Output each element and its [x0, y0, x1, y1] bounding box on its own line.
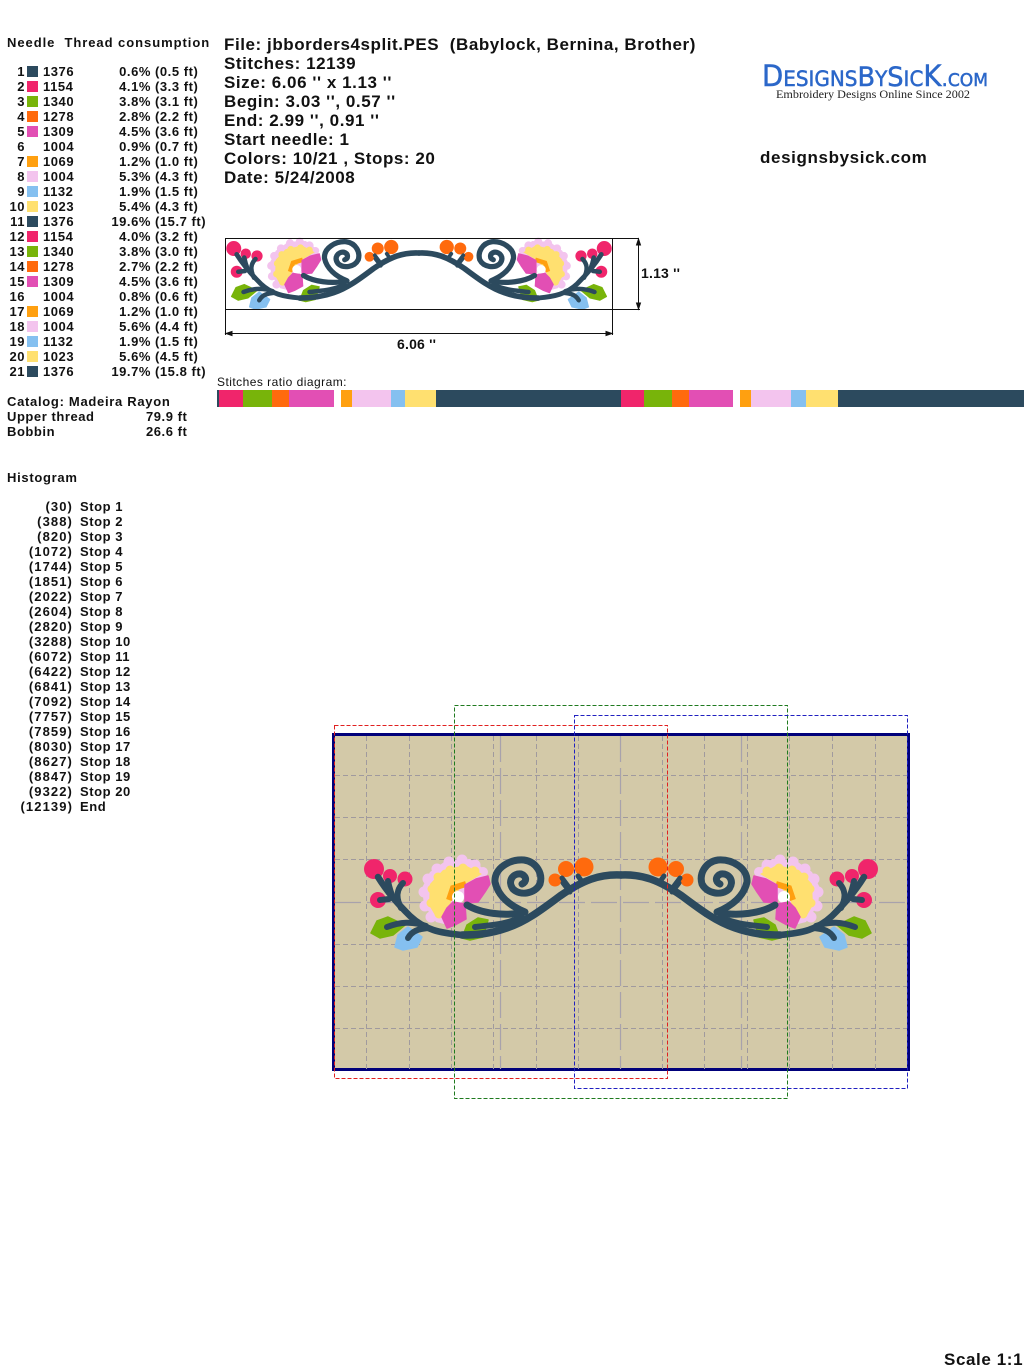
stop 17: Stop 17 — [80, 739, 131, 754]
needle 8 — [17, 169, 198, 184]
stop 7: Stop 7 — [80, 589, 123, 604]
needle 19: 19 — [9, 334, 25, 349]
needle 9: 1.9% — [119, 184, 151, 199]
needle 4 — [17, 109, 198, 124]
stop 14: Stop 14 — [80, 694, 131, 709]
stop 7 — [29, 589, 123, 604]
needle 8: (4.3 ft) — [155, 169, 198, 184]
hoop canvas with split design — [320, 695, 920, 1110]
needle 19: (1.5 ft) — [155, 334, 198, 349]
hoop background — [334, 734, 908, 1070]
stop 20: (9322) — [29, 784, 73, 799]
end total — [0, 799, 130, 814]
needle 13: 13 — [9, 244, 25, 259]
stop 19: Stop 19 — [80, 769, 131, 784]
stop 20 — [0, 784, 130, 799]
stop 9 — [29, 619, 123, 634]
stop 16: (7859) — [29, 724, 73, 739]
needle 9: 9 — [17, 184, 25, 199]
needle 12 — [9, 229, 198, 244]
needle 12: 1154 — [43, 229, 73, 244]
stop 9: Stop 9 — [80, 619, 123, 634]
needle 16: 16 — [9, 289, 25, 304]
needle 12: 12 — [9, 229, 25, 244]
split hoop outline: red — [334, 726, 668, 1078]
stop 19 — [0, 769, 130, 784]
logo: DesignsBySick.com: DESIGNSBYSICK.COM — [762, 59, 988, 93]
design info block — [224, 35, 704, 189]
needle 20: 1023 — [43, 349, 74, 364]
stop 3 — [37, 529, 123, 544]
stitches ratio bar — [217, 390, 1024, 407]
needle 7: 1069 — [43, 154, 74, 169]
needle 18: 1004 — [43, 319, 74, 334]
stop 6 — [29, 574, 123, 589]
needle 21: 19.7% — [111, 364, 151, 379]
stop 1: (30) — [45, 499, 73, 514]
needle 18 — [9, 319, 198, 334]
stop 11: Stop 11 — [80, 649, 130, 664]
needle 16: 1004 — [43, 289, 74, 304]
stop 17: (8030) — [29, 739, 73, 754]
stop 2: (388) — [37, 514, 73, 529]
stop 4: Stop 4 — [80, 544, 123, 559]
embroidery motif — [364, 854, 878, 950]
stop 3: (820) — [37, 529, 73, 544]
needle 12: 4.0% — [119, 229, 151, 244]
stop 13: (6841) — [29, 679, 73, 694]
catalog and thread totals — [7, 394, 187, 439]
needle 15: 15 — [9, 274, 25, 289]
stop 18: Stop 18 — [80, 754, 131, 769]
stop 15 — [29, 709, 131, 724]
needle 6: 1004 — [43, 139, 74, 154]
needle 2: 4.1% — [119, 79, 151, 94]
needle 5: 5 — [17, 124, 25, 139]
stop 13 — [29, 679, 131, 694]
end total: End — [80, 799, 106, 814]
needle 1: 1376 — [43, 64, 74, 79]
needle 9: (1.5 ft) — [155, 184, 198, 199]
split hoop outline: green — [454, 706, 788, 1098]
needle 13: 1340 — [43, 244, 74, 259]
needle 11: 1376 — [43, 214, 74, 229]
stop 18: (8627) — [29, 754, 73, 769]
upper thread total: Upper thread — [7, 409, 95, 424]
needle 21 — [9, 364, 206, 379]
needle 3: 1340 — [43, 94, 74, 109]
needle 20 — [9, 349, 198, 364]
stitches ratio label: Stitches ratio diagram: — [217, 375, 347, 389]
needle 2: (3.3 ft) — [155, 79, 198, 94]
needle 15: (3.6 ft) — [155, 274, 198, 289]
scale label: Scale 1:1 — [944, 1350, 1023, 1369]
stop 13: Stop 13 — [80, 679, 131, 694]
needle 5: (3.6 ft) — [155, 124, 198, 139]
stop 14 — [29, 694, 131, 709]
needle 18: 18 — [9, 319, 25, 334]
needle 11: (15.7 ft) — [155, 214, 206, 229]
needle 7 — [17, 154, 198, 169]
stop 3: Stop 3 — [80, 529, 123, 544]
needle 20: 5.6% — [119, 349, 151, 364]
needle 6: 6 — [17, 139, 25, 154]
stop 9: (2820) — [29, 619, 73, 634]
needle 11: 11 — [10, 214, 25, 229]
needle 3 — [17, 94, 198, 109]
needle 7: (1.0 ft) — [155, 154, 198, 169]
needle 15: 1309 — [43, 274, 74, 289]
needle 19: 1132 — [43, 334, 73, 349]
stop 2 — [37, 514, 123, 529]
stitches: Stitches: 12139 — [224, 54, 356, 73]
needle 1: (0.5 ft) — [155, 64, 198, 79]
needle 14: 1278 — [43, 259, 74, 274]
histogram heading: Histogram — [7, 470, 78, 485]
needle 14: (2.2 ft) — [155, 259, 198, 274]
stop 12 — [29, 664, 131, 679]
upper thread value: 79.9 ft — [146, 409, 187, 424]
needle 18: (4.4 ft) — [155, 319, 198, 334]
needle 3: 3.8% — [119, 94, 151, 109]
needle 13 — [9, 244, 198, 259]
needle 20: 20 — [9, 349, 25, 364]
colors and stops: Colors: 10/21 , Stops: 20 — [224, 149, 435, 168]
needle 10: 5.4% — [119, 199, 151, 214]
needle 16 — [9, 289, 198, 304]
needle 6: (0.7 ft) — [155, 139, 198, 154]
stop 12: (6422) — [29, 664, 73, 679]
needle 2 — [17, 79, 198, 94]
stop 4: (1072) — [29, 544, 73, 559]
needle 21: (15.8 ft) — [155, 364, 206, 379]
date: Date: 5/24/2008 — [224, 168, 355, 187]
needle 11: 19.6% — [111, 214, 151, 229]
end total: (12139) — [20, 799, 73, 814]
height label: 1.13 '' — [641, 265, 680, 281]
stop 5: Stop 5 — [80, 559, 123, 574]
stop 10: Stop 10 — [80, 634, 131, 649]
stop 19: (8847) — [29, 769, 73, 784]
logo: DesignsBySick.com: Embroidery Designs Online Since 2002 — [776, 87, 970, 101]
split hoop outline: blue — [574, 716, 908, 1088]
needle 6 — [17, 139, 198, 154]
stop 8: Stop 8 — [80, 604, 123, 619]
needle 15: 4.5% — [119, 274, 151, 289]
needle 18: 5.6% — [119, 319, 151, 334]
needle 5: 1309 — [43, 124, 74, 139]
needle 15 — [9, 274, 198, 289]
needle 10: 10 — [9, 199, 25, 214]
file name: File: jbborders4split.PES (Babylock, Bernina, Brother) — [224, 35, 696, 54]
needle 3: 3 — [17, 94, 25, 109]
needle 17 — [9, 304, 198, 319]
needle 8: 5.3% — [119, 169, 151, 184]
needle 13: 3.8% — [119, 244, 151, 259]
embroidery motif preview — [226, 238, 612, 309]
needle 14: 2.7% — [119, 259, 151, 274]
needle 19: 1.9% — [119, 334, 151, 349]
stop 5 — [29, 559, 123, 574]
needle 11 — [10, 214, 206, 229]
needle 10: (4.3 ft) — [155, 199, 198, 214]
stop 2: Stop 2 — [80, 514, 123, 529]
needle 7: 7 — [17, 154, 25, 169]
stop 1 — [45, 499, 123, 514]
needle 1: 1 — [17, 64, 25, 79]
bobbin value: 26.6 ft — [146, 424, 187, 439]
stop 12: Stop 12 — [80, 664, 131, 679]
needle 16: (0.6 ft) — [155, 289, 198, 304]
needle 9 — [17, 184, 198, 199]
stop 15: (7757) — [29, 709, 73, 724]
end: End: 2.99 '', 0.91 '' — [224, 111, 380, 130]
stop 16 — [29, 724, 131, 739]
stop 8 — [29, 604, 123, 619]
catalog: Catalog: Madeira Rayon — [7, 394, 170, 409]
begin: Begin: 3.03 '', 0.57 '' — [224, 92, 396, 111]
bobbin total: Bobbin — [7, 424, 55, 439]
needle 5 — [17, 124, 198, 139]
stop 5: (1744) — [29, 559, 73, 574]
needle 2: 2 — [17, 79, 25, 94]
needle 6: 0.9% — [119, 139, 151, 154]
size: Size: 6.06 '' x 1.13 '' — [224, 73, 392, 92]
needle 21: 21 — [9, 364, 25, 379]
needle 14 — [9, 259, 198, 274]
needle 16: 0.8% — [119, 289, 151, 304]
bounding box and dimension lines — [225, 238, 640, 336]
needle 5: 4.5% — [119, 124, 151, 139]
needle 7: 1.2% — [119, 154, 151, 169]
stop 15: Stop 15 — [80, 709, 131, 724]
histogram stop list — [20, 499, 131, 814]
start needle: Start needle: 1 — [224, 130, 350, 149]
needle 10 — [9, 199, 198, 214]
stop 17 — [0, 739, 130, 754]
stop 18 — [0, 754, 130, 769]
needle 13: (3.0 ft) — [155, 244, 198, 259]
needle 4: 2.8% — [119, 109, 151, 124]
stop 7: (2022) — [29, 589, 73, 604]
website link text: designsbysick.com — [760, 148, 927, 167]
needle 4: 4 — [17, 109, 25, 124]
needle 19 — [9, 334, 198, 349]
needle 17: 1069 — [43, 304, 74, 319]
needle 1: 0.6% — [119, 64, 151, 79]
needle 8: 1004 — [43, 169, 74, 184]
stop 20: Stop 20 — [80, 784, 131, 799]
needle 14: 14 — [9, 259, 25, 274]
needle 1 — [17, 64, 198, 79]
stop 8: (2604) — [29, 604, 73, 619]
needle 17: (1.0 ft) — [155, 304, 198, 319]
needle 12: (3.2 ft) — [155, 229, 198, 244]
needle 4: 1278 — [43, 109, 74, 124]
stop 14: (7092) — [29, 694, 73, 709]
stop 16: Stop 16 — [80, 724, 131, 739]
needle 4: (2.2 ft) — [155, 109, 198, 124]
stop 10: (3288) — [29, 634, 73, 649]
needle 3: (3.1 ft) — [155, 94, 198, 109]
width label: 6.06 '' — [397, 336, 436, 352]
stop 11: (6072) — [29, 649, 73, 664]
stop 6: Stop 6 — [80, 574, 123, 589]
stop 10 — [29, 634, 131, 649]
needle 20: (4.5 ft) — [155, 349, 198, 364]
stop 6: (1851) — [29, 574, 73, 589]
needle 10: 1023 — [43, 199, 74, 214]
logo: DesignsBySick.com — [755, 55, 995, 105]
needle 9: 1132 — [43, 184, 73, 199]
needle 2: 1154 — [43, 79, 73, 94]
needle 8: 8 — [17, 169, 25, 184]
needle 17: 1.2% — [119, 304, 151, 319]
needle 21: 1376 — [43, 364, 74, 379]
needle 17: 17 — [9, 304, 25, 319]
stop 4 — [29, 544, 123, 559]
stop 11 — [29, 649, 130, 664]
small design preview with dimensions — [215, 230, 695, 355]
needle table header: Needle Thread consumption — [7, 35, 210, 50]
needle thread table — [9, 64, 206, 379]
stop 1: Stop 1 — [80, 499, 123, 514]
